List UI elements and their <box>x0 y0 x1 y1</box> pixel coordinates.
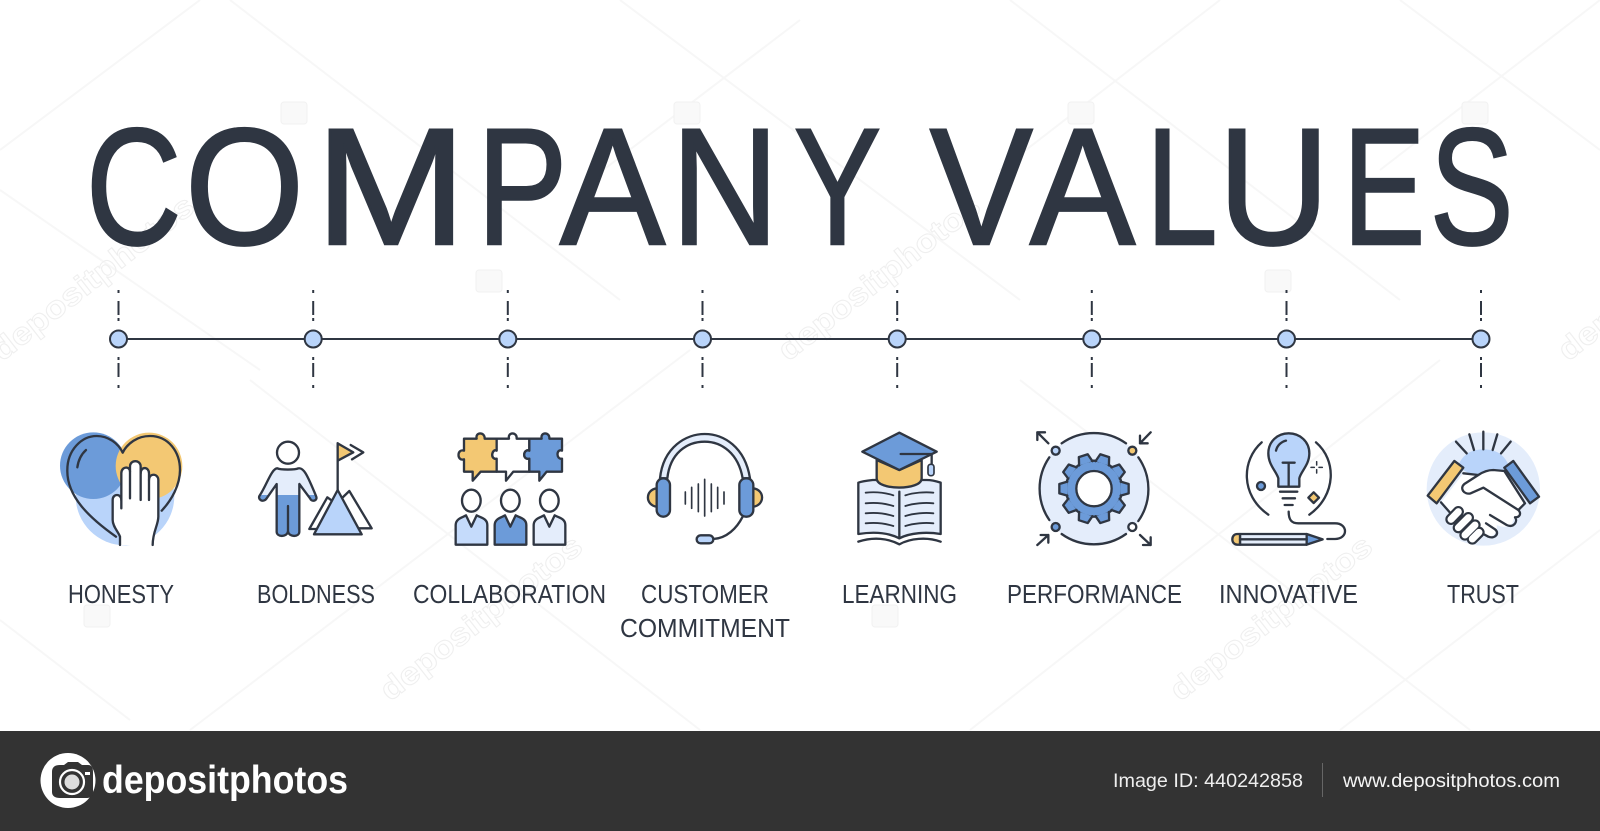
label: trust: TRUST <box>1447 581 1519 609</box>
icon: learning cap and book <box>858 433 941 544</box>
label: innovative: INNOVATIVE <box>1219 581 1358 609</box>
title: U <box>1218 95 1330 280</box>
icon: customer commitment headset <box>648 434 762 543</box>
title: N <box>671 95 779 280</box>
title: O <box>185 95 304 280</box>
watermark pattern: depositphotos <box>373 528 589 708</box>
title: A <box>560 95 665 280</box>
watermark pattern: depositphotos <box>1163 528 1379 708</box>
title: P <box>476 95 567 280</box>
label: honesty: HONESTY <box>68 581 174 609</box>
title: A <box>1030 95 1135 280</box>
title: E <box>1343 95 1425 280</box>
icon: honesty heart and hand <box>60 432 182 545</box>
title: C <box>86 95 181 280</box>
icon: collaboration puzzle and people <box>456 433 565 545</box>
title: V <box>930 95 1033 280</box>
label: boldness: BOLDNESS <box>257 581 375 609</box>
icon: performance gear <box>1037 432 1151 545</box>
icon: innovative bulb and pencil <box>1232 433 1345 545</box>
label: customer commitment <box>620 581 790 643</box>
icon: trust handshake <box>1427 432 1540 546</box>
title: S <box>1430 95 1513 280</box>
label: customer commitment: COMMITMENT <box>620 615 790 643</box>
title: L <box>1146 95 1217 280</box>
title: Y <box>794 95 881 280</box>
footer bar <box>0 731 1600 831</box>
watermark pattern: depositphotos <box>771 188 987 368</box>
image id: Image ID: 440242858 <box>1113 770 1303 792</box>
label: collaboration: COLLABORATION <box>413 581 606 609</box>
logo: camera mark <box>40 753 96 808</box>
timeline <box>110 290 1490 388</box>
label: performance: PERFORMANCE <box>1007 581 1182 609</box>
icon: boldness person and mountain flag <box>259 442 372 536</box>
website: www.depositphotos.com <box>1342 770 1560 792</box>
label: learning: LEARNING <box>842 581 957 609</box>
title <box>86 95 1513 280</box>
logo: wordmark: depositphotos <box>102 759 348 802</box>
label: customer commitment: CUSTOMER <box>641 581 769 609</box>
title: M <box>315 95 467 280</box>
